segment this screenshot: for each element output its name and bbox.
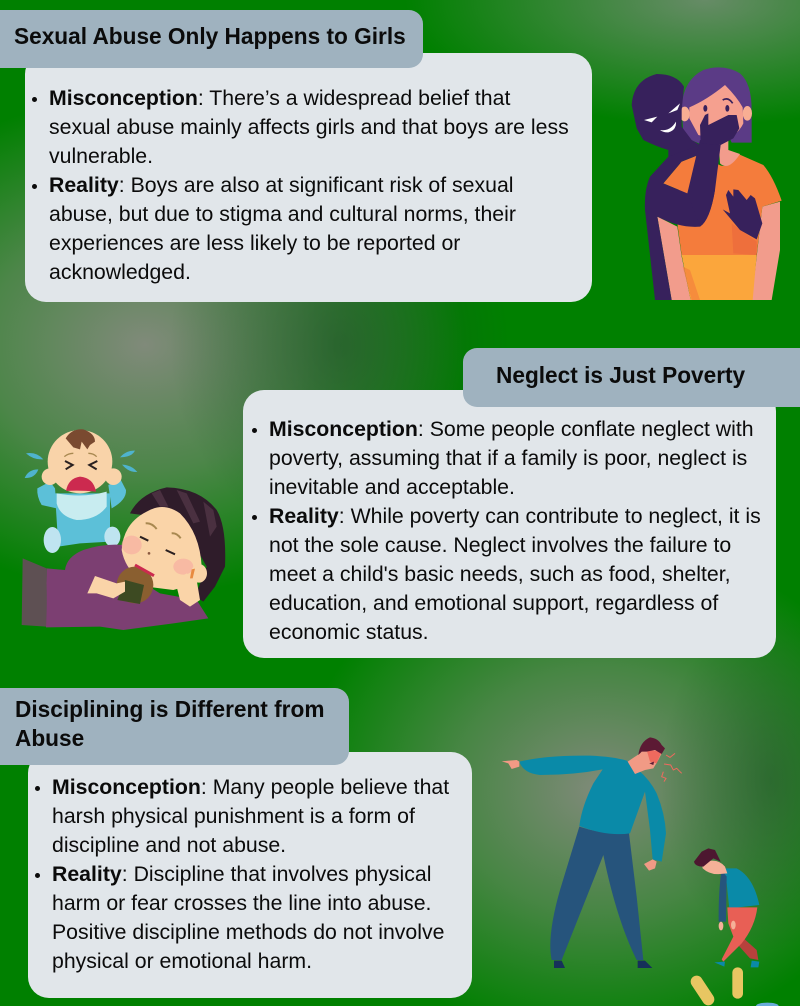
reality text block: meet a child's basic needs, such as food, shelter,: [269, 562, 731, 586]
panel: disciplining text card: [28, 752, 472, 998]
misconception text block: inevitable and acceptable.: [269, 475, 515, 499]
heading: Disciplining is Different from Abuse: Abuse: [15, 725, 84, 751]
misconception text block: [35, 775, 449, 857]
misconception text block: discipline and not abuse.: [52, 833, 286, 857]
misconception text block: sexual abuse mainly affects girls and that boys are less: [49, 115, 569, 139]
misconception text block: poverty, assuming that if a family is poor, neglect is: [269, 446, 747, 470]
reality text block: harm or fear crosses the line into abuse.: [52, 891, 431, 915]
heading: Neglect is Just Poverty: Neglect is Just Poverty: [496, 362, 745, 388]
misconception text block: vulnerable.: [49, 144, 153, 168]
misconception text block: harsh physical punishment is a form of: [52, 804, 415, 828]
reality text block: experiences are less likely to be reported or: [49, 231, 460, 255]
icon: angry father pointing and child with head down: [502, 737, 779, 1006]
reality text block: economic status.: [269, 620, 429, 644]
heading: Sexual Abuse Only Happens to Girls: [0, 10, 423, 68]
misconception text block: Misconception: There’s a widespread belief that: [49, 86, 510, 110]
reality text block: not the sole cause. Neglect involves the failure to: [269, 533, 731, 557]
reality text block: abuse, but due to stigma and cultural norms, their: [49, 202, 516, 226]
reality text block: [252, 504, 761, 644]
reality text block: Reality: Boys are also at significant risk of sexual: [49, 173, 514, 197]
reality text block: physical or emotional harm.: [52, 949, 312, 973]
reality text block: Positive discipline methods do not involve: [52, 920, 444, 944]
heading: Sexual Abuse Only Happens to Girls: Sexual Abuse Only Happens to Girls: [14, 23, 406, 49]
heading: Disciplining is Different from Abuse: [0, 688, 349, 765]
heading: Neglect is Just Poverty: [463, 348, 800, 407]
reality text block: Reality: Discipline that involves physical: [52, 862, 431, 886]
misconception text block: Misconception: Some people conflate neglect with: [269, 417, 754, 441]
misconception text block: [32, 86, 569, 168]
panel: sexual abuse text card: [25, 53, 592, 302]
reality text block: acknowledged.: [49, 260, 191, 284]
reality text block: [32, 173, 516, 284]
misconception text block: Misconception: Many people believe that: [52, 775, 449, 799]
reality text block: education, and emotional support, regardless of: [269, 591, 718, 615]
misconception text block: [252, 417, 754, 499]
reality text block: [35, 862, 444, 973]
reality text block: Reality: While poverty can contribute to neglect, it is: [269, 504, 761, 528]
icon: shadow figure covering girl's mouth: [632, 67, 782, 300]
heading: Disciplining is Different from Abuse: Disciplining is Different from: [15, 696, 324, 722]
panel: neglect text card: [243, 390, 776, 658]
icon: crying baby and mother lying down: [22, 429, 226, 630]
